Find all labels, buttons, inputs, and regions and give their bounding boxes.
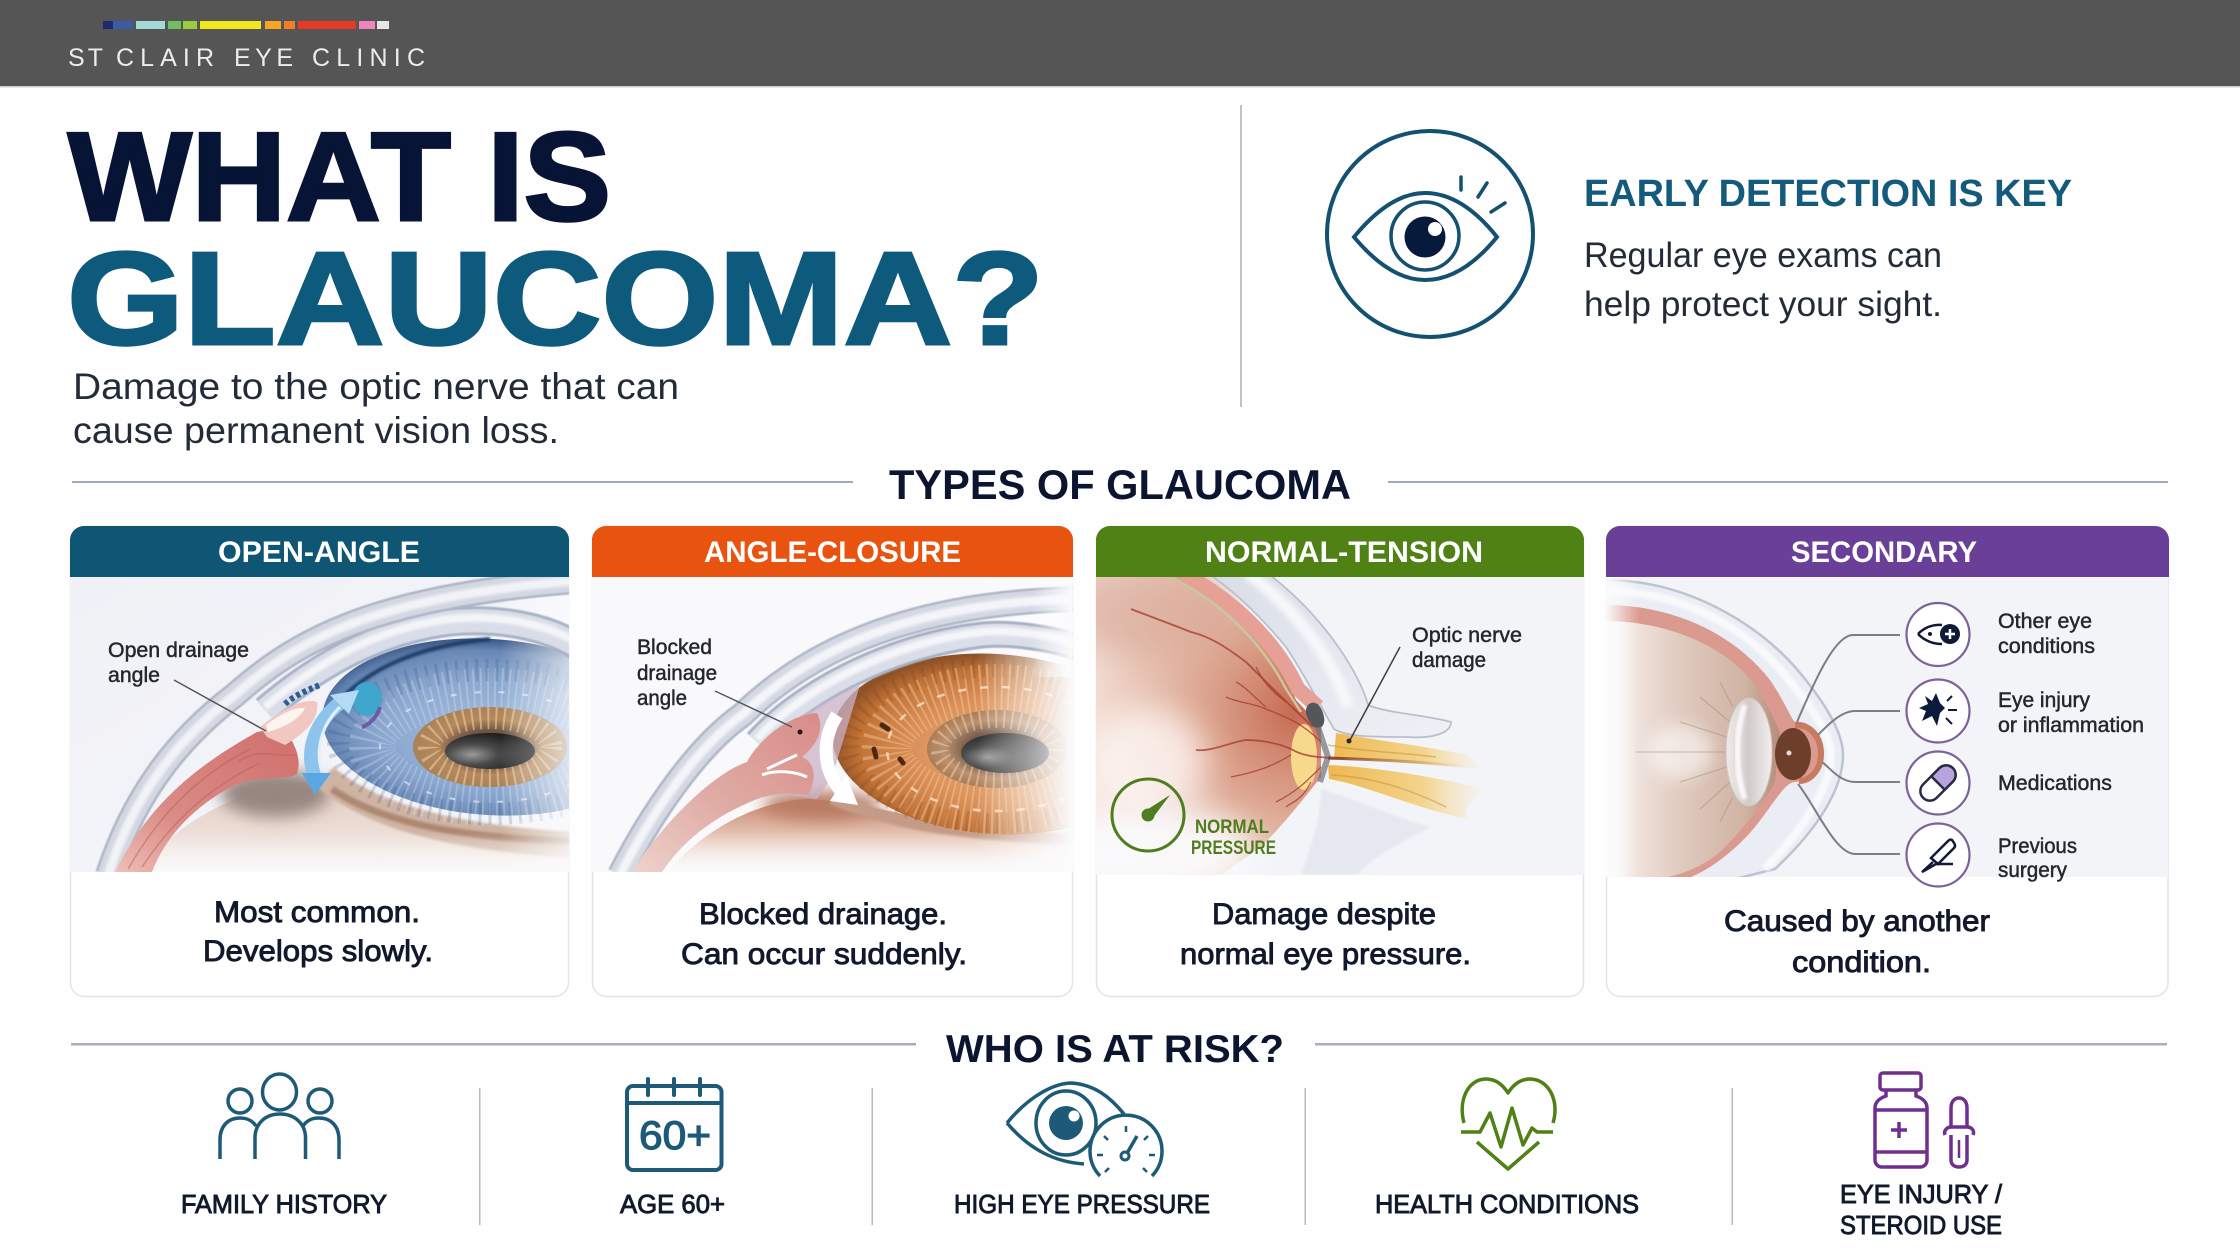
label: blocked drainage angle	[637, 636, 717, 710]
anterior chamber	[1775, 728, 1811, 780]
icon: eye injury	[1906, 680, 1970, 742]
icon: previous surgery	[1906, 824, 1970, 886]
icon: calendar: 60+	[639, 1114, 711, 1158]
label: optic nerve damage	[1412, 624, 1522, 672]
illustration: optic nerve	[1096, 577, 1584, 875]
subtitle	[73, 366, 679, 451]
subtitle: cause permanent vision loss.	[73, 410, 559, 451]
panel: open-angle	[70, 526, 570, 998]
list: secondary causes: Medications	[1998, 772, 2112, 795]
list: secondary causes: or inflammation	[1998, 714, 2144, 737]
retinal vessels	[1131, 609, 1334, 807]
header: open-angle	[70, 526, 569, 577]
drainage tissue	[632, 685, 860, 872]
callout: early detection: help protect your sight.	[1584, 285, 1942, 324]
leader line	[174, 680, 266, 731]
header bar	[0, 0, 2240, 88]
caption: angle-closure: Can occur suddenly.	[681, 938, 967, 971]
colour strip logo	[103, 21, 389, 29]
risk: age 60+: AGE 60+	[620, 1189, 725, 1219]
label: blocked drainage angle: drainage	[637, 662, 717, 685]
caption: secondary: Caused by another	[1724, 905, 1990, 938]
icon: bottle and dropper	[1875, 1073, 1974, 1167]
label: open drainage angle	[108, 639, 249, 687]
panel: normal-tension	[1056, 526, 1584, 996]
pupil	[445, 733, 535, 769]
caption: angle-closure: Blocked drainage.	[699, 898, 947, 931]
sclera	[1206, 572, 1451, 737]
optic nerve fibres	[1334, 733, 1481, 769]
illustration: angle-closure eye	[592, 577, 1073, 872]
list: secondary causes	[1998, 610, 2144, 882]
icon: family	[220, 1074, 339, 1159]
leader line	[1350, 647, 1400, 740]
list: secondary causes: Other eye	[1998, 610, 2092, 633]
orange iris	[833, 654, 1069, 834]
title: WHAT IS	[68, 106, 611, 247]
risk: eye injury / steroid use: STEROID USE	[1840, 1210, 2002, 1240]
brown pupil ring	[927, 710, 1067, 788]
icon: eye in circle	[1327, 131, 1533, 337]
retina	[1096, 577, 1321, 875]
header: normal-tension	[1096, 526, 1584, 577]
list: secondary causes: Previous	[1998, 835, 2077, 858]
illustration: eye cross-section	[1605, 577, 2168, 879]
list: secondary causes: conditions	[1998, 635, 2095, 658]
ciliary rays	[1635, 682, 1733, 822]
callout: early detection: Regular eye exams can	[1584, 236, 1942, 275]
caption: open-angle	[203, 896, 433, 968]
leader line	[715, 691, 792, 727]
gauge: normal pressure: PRESSURE	[1191, 838, 1276, 859]
clinic name: ST	[68, 44, 103, 72]
caption: secondary	[1724, 905, 1990, 979]
label: blocked drainage angle: angle	[637, 687, 687, 710]
caption: normal-tension	[1180, 898, 1471, 971]
blue iris	[323, 636, 569, 826]
clinic name	[68, 44, 425, 72]
icon: heart with pulse	[1461, 1079, 1555, 1169]
gauge: normal pressure	[1112, 779, 1276, 859]
title	[67, 106, 1044, 372]
caption: angle-closure	[681, 898, 967, 971]
callout: early detection	[1584, 173, 2072, 324]
header: angle-closure	[592, 526, 1073, 577]
risk: family history: FAMILY HISTORY	[181, 1189, 387, 1219]
caption: normal-tension: normal eye pressure.	[1180, 938, 1471, 971]
clinic name: CLAIR	[116, 44, 214, 72]
header: open-angle: OPEN-ANGLE	[218, 536, 420, 569]
icon: other eye conditions	[1906, 603, 1970, 666]
label: open drainage angle: angle	[108, 664, 160, 687]
icon: medications	[1906, 752, 1970, 814]
pupil	[961, 733, 1049, 773]
optic disc	[1291, 724, 1317, 790]
label: optic nerve damage: damage	[1412, 649, 1486, 672]
panel: angle-closure	[592, 526, 1074, 998]
leader lines	[1797, 635, 1900, 854]
panel: secondary	[1605, 526, 2169, 996]
title: GLAUCOMA?	[67, 225, 1044, 372]
icon: eye and gauge	[1007, 1083, 1162, 1176]
header: secondary: SECONDARY	[1791, 536, 1977, 569]
globe interior	[1605, 621, 1780, 879]
list: secondary causes: Eye injury	[1998, 689, 2090, 712]
subtitle: Damage to the optic nerve that can	[73, 366, 679, 407]
gauge: normal pressure: NORMAL	[1195, 817, 1269, 838]
blue arrow	[302, 682, 382, 795]
heading: types of glaucoma: TYPES OF GLAUCOMA	[889, 461, 1351, 508]
risk: high eye pressure: HIGH EYE PRESSURE	[954, 1189, 1210, 1219]
risk: family history	[181, 1074, 387, 1219]
pink wall	[1605, 605, 1823, 879]
risk: eye injury / steroid use	[1840, 1073, 2003, 1240]
heading: who is at risk: WHO IS AT RISK?	[946, 1028, 1284, 1071]
callout: early detection: EARLY DETECTION IS KEY	[1584, 173, 2072, 215]
header: secondary	[1606, 526, 2169, 577]
risk: health conditions	[1375, 1079, 1639, 1219]
cornea bands	[108, 581, 582, 875]
caption: normal-tension: Damage despite	[1212, 898, 1436, 931]
clinic name: EYE	[234, 44, 293, 72]
header: normal-tension: NORMAL-TENSION	[1205, 536, 1483, 569]
clinic name: CLINIC	[312, 44, 425, 72]
caption: secondary: condition.	[1792, 946, 1931, 979]
lens	[1726, 698, 1772, 806]
risk: health conditions: HEALTH CONDITIONS	[1375, 1189, 1639, 1219]
caption: open-angle: Develops slowly.	[203, 935, 433, 968]
brown pupil ring	[413, 707, 567, 787]
drainage tissue	[115, 685, 320, 872]
label: optic nerve damage: Optic nerve	[1412, 624, 1522, 647]
cornea bands	[620, 577, 1082, 875]
white arrow	[826, 715, 858, 805]
risk: high eye pressure	[954, 1083, 1210, 1219]
label: open drainage angle: Open drainage	[108, 639, 249, 662]
illustration: open-angle eye	[70, 577, 569, 872]
pink layer	[1178, 571, 1318, 707]
label: blocked drainage angle: Blocked	[637, 636, 712, 659]
risk: eye injury / steroid use: EYE INJURY /	[1840, 1179, 2003, 1209]
list: secondary causes: surgery	[1998, 859, 2067, 882]
caption: open-angle: Most common.	[214, 896, 420, 929]
risk: age 60+	[620, 1079, 725, 1219]
header: angle-closure: ANGLE-CLOSURE	[704, 536, 961, 569]
